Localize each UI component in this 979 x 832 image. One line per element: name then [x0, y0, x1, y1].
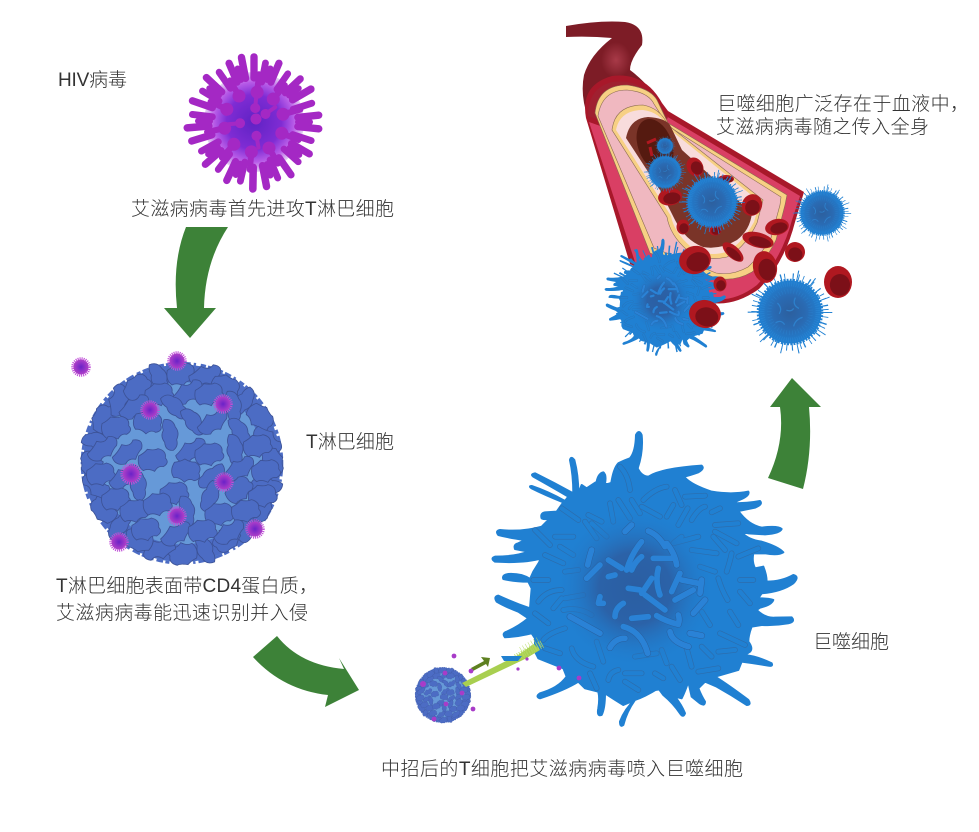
- HIV virus icon: [187, 57, 319, 189]
- green spray of virus: [462, 641, 542, 687]
- arrow: down: [164, 227, 228, 338]
- arrow: to the right: [253, 636, 359, 707]
- arrow: up: [768, 378, 821, 489]
- vessel tube: [566, 22, 662, 140]
- caption: CD4 recognition: [56, 575, 318, 624]
- caption: macrophages in blood: 巨噬细胞广泛存在于血液中，: [717, 93, 969, 115]
- blood vessel cross-section: [566, 22, 852, 355]
- T lymphocyte with attached viruses: [73, 353, 283, 566]
- outer wall: [585, 76, 804, 303]
- caption: virus attacks T cells: 艾滋病病毒首先进攻T淋巴细胞: [131, 198, 394, 220]
- caption: macrophages in blood: 艾滋病病毒随之传入全身: [716, 116, 929, 138]
- lumen: [626, 117, 752, 248]
- label: HIV virus: HIV病毒: [58, 69, 127, 91]
- caption: T cell sprays virus: 中招后的T细胞把艾滋病病毒喷入巨噬细胞: [381, 758, 743, 780]
- caption: macrophages in blood: [716, 93, 969, 138]
- caption: CD4 recognition: 艾滋病病毒能迅速识别并入侵: [56, 602, 308, 624]
- blue macrophages around vessel: [656, 137, 674, 155]
- label: T lymphocyte: T淋巴细胞: [306, 431, 394, 453]
- red blood cells: [657, 154, 809, 266]
- caption: CD4 recognition: T淋巴细胞表面带CD4蛋白质，: [56, 575, 318, 597]
- label: macrophage: 巨噬细胞: [813, 631, 889, 653]
- small arrow: [471, 657, 490, 671]
- macrophage: [492, 432, 797, 726]
- infected T cell spraying virus: [415, 641, 581, 723]
